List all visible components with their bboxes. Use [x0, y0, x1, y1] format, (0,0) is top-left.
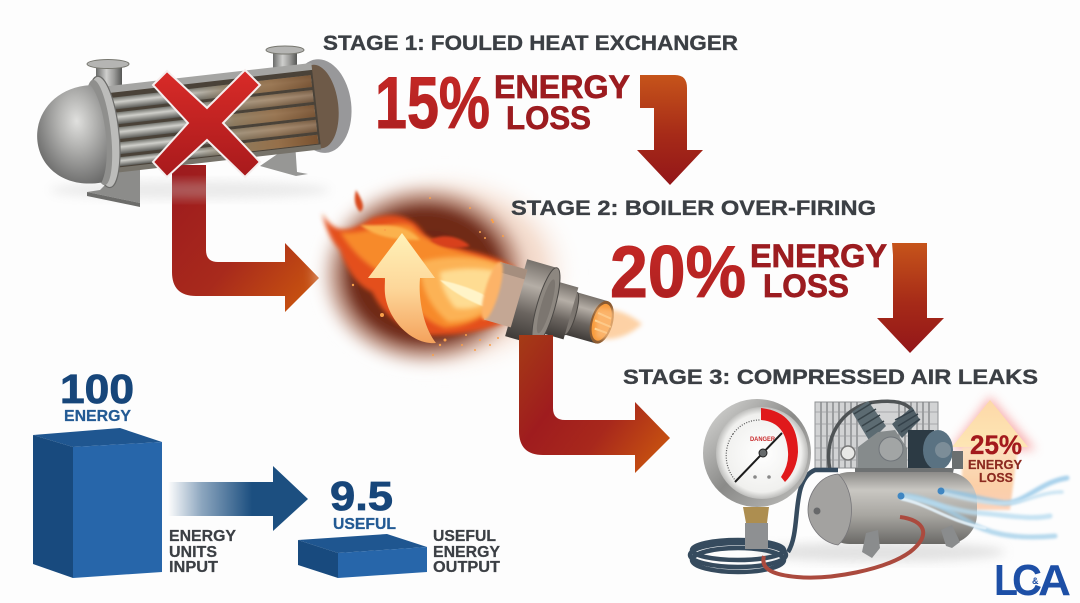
stat: 20% energy loss: LOSS [763, 268, 849, 304]
label: energy units input: INPUT [169, 559, 218, 576]
stat: 15% energy loss: 15% [375, 63, 490, 144]
stat: 15% energy loss: ENERGY [494, 69, 630, 105]
stat: 100 energy: 100 [60, 366, 134, 412]
title: stage 1: STAGE 1: FOULED HEAT EXCHANGER [323, 32, 738, 55]
stat: 9.5 useful: USEFUL [333, 516, 396, 533]
label: useful energy output [433, 528, 500, 576]
brass fitting [743, 507, 769, 523]
sparks [352, 197, 504, 356]
icon: rising heat arrow [368, 233, 436, 343]
air leak streams [902, 478, 1067, 537]
leak nozzles [898, 488, 944, 500]
gauge stem [745, 523, 768, 549]
25% loss label: ENERGY [968, 457, 1022, 472]
left end cap [31, 75, 125, 195]
arrow: stage 1 to stage 2 [637, 75, 703, 185]
label: useful energy output: ENERGY [433, 544, 500, 561]
base plate [855, 468, 954, 483]
danger zone [761, 408, 798, 482]
icon: red cross [153, 70, 260, 177]
pressure gauge: DANGER [750, 436, 775, 443]
illustration: air compressor [690, 396, 1067, 578]
burner flange [505, 259, 557, 345]
label: energy units input: ENERGY [169, 528, 236, 545]
logo: & [1032, 576, 1039, 586]
stat: 15% energy loss: LOSS [506, 100, 591, 136]
tube bundle [107, 75, 319, 167]
vessel body [31, 48, 358, 195]
stat: 15% energy loss [375, 63, 630, 144]
25% loss label: LOSS [979, 470, 1013, 485]
25% loss label [968, 430, 1022, 485]
chart: input energy block [33, 428, 162, 578]
label: energy units input: UNITS [169, 544, 217, 561]
exhaust flame [596, 308, 642, 339]
title: stage 3: STAGE 3: COMPRESSED AIR LEAKS [623, 366, 1038, 389]
stat: 9.5 useful: 9.5 [330, 473, 393, 519]
label: energy units input [169, 528, 236, 576]
small gauge [841, 446, 855, 460]
stat: 20% energy loss: 20% [610, 232, 746, 313]
electric motor [908, 430, 963, 470]
stat: 20% energy loss [610, 232, 887, 313]
needle [735, 433, 782, 482]
burner nozzle [474, 250, 623, 364]
illustration: fouled heat exchanger [31, 46, 358, 207]
label: useful energy output: USEFUL [433, 528, 496, 545]
stat: 9.5 useful [330, 473, 396, 533]
fan grill [815, 402, 938, 468]
logo [994, 556, 1071, 603]
burner mid section [539, 280, 578, 339]
chart: useful output block [298, 534, 427, 578]
warning triangle [952, 400, 1028, 510]
heat halo [313, 177, 537, 373]
stat: 100 energy: ENERGY [64, 408, 131, 425]
stat: 20% energy loss: ENERGY [750, 238, 887, 274]
red hose [763, 517, 923, 578]
nozzles [87, 46, 304, 90]
outer heat glow [307, 164, 583, 380]
floor shadow [755, 542, 1005, 562]
arrow: burner to compressor [519, 335, 670, 473]
title: stage 2: STAGE 2: BOILER OVER-FIRING [511, 197, 876, 220]
saddle supports [87, 142, 308, 207]
receiver tank [808, 472, 977, 558]
25% loss label: 25% [970, 430, 1022, 460]
ground shadow [50, 181, 330, 199]
front collar [484, 262, 527, 327]
warning glow [950, 396, 1036, 450]
illustration: burner flame [307, 164, 642, 380]
arrow: energy conversion [168, 466, 308, 531]
pump head [829, 401, 920, 470]
arrow: stage 2 to stage 3 [877, 243, 944, 353]
label: useful energy output: OUTPUT [433, 559, 500, 576]
coiled air hose [690, 470, 838, 572]
arrow: exchanger to burner [172, 165, 319, 312]
burner end section [565, 292, 608, 343]
pressure gauge [703, 399, 811, 507]
flames [322, 190, 515, 335]
